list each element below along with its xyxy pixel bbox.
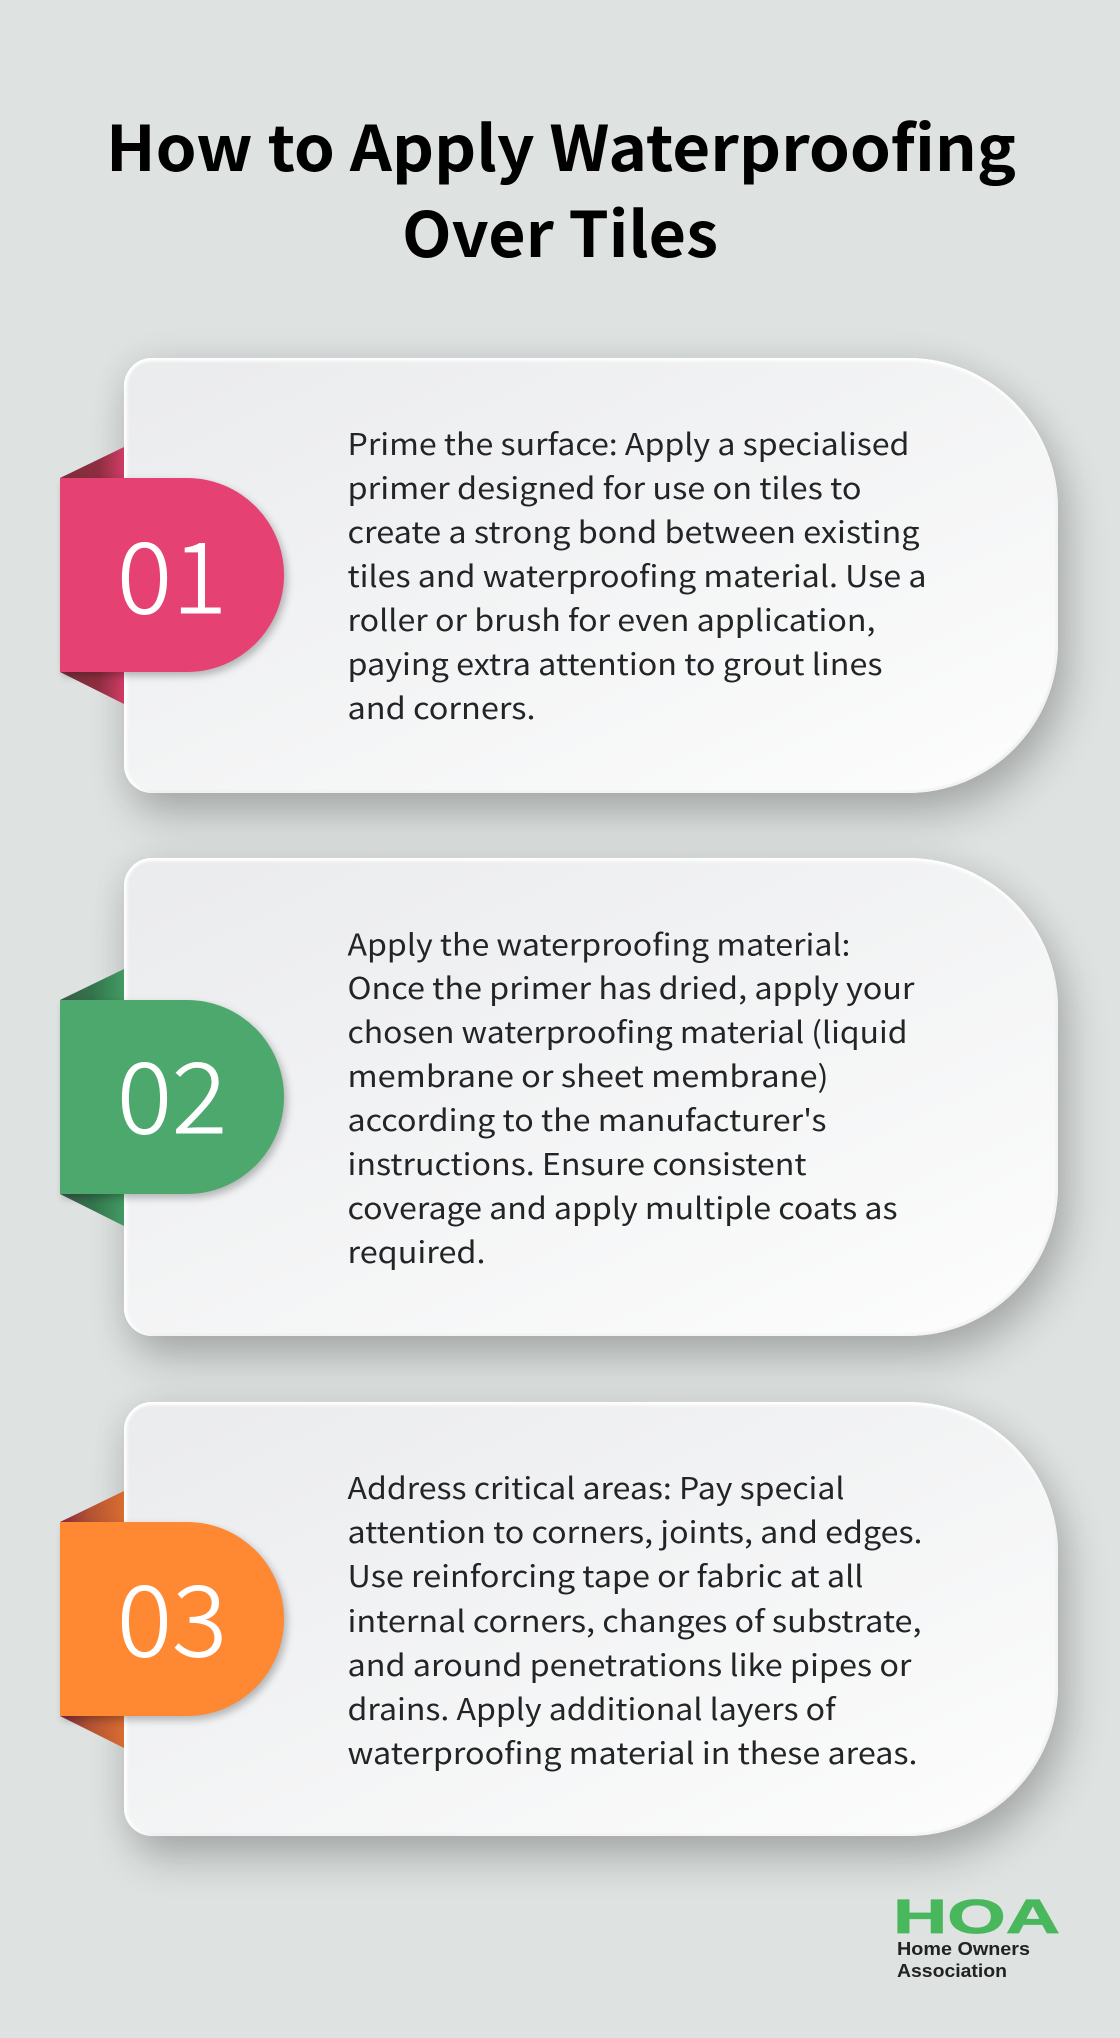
panel: step 3	[59, 1394, 1086, 1878]
text: step 3: waterproofing material in these areas.	[348, 1730, 918, 1773]
title	[106, 98, 1016, 275]
ribbon folds: step 3	[60, 1491, 124, 1748]
text: step 2: Apply the waterproofing material:	[348, 922, 850, 964]
text: step 2: membrane or sheet membrane)	[348, 1053, 828, 1096]
logo: HOA Home Owners Association	[893, 1891, 1060, 1981]
logo: HOA Home Owners Association: Home Owners	[897, 1938, 1030, 1959]
text: step 1: primer designed for use on tiles to	[348, 465, 862, 508]
text: step 2: Once the primer has dried, apply your	[348, 965, 915, 1008]
badge: 01: 01	[117, 500, 227, 642]
text: step 3: and around penetrations like pipes or	[348, 1642, 912, 1685]
title: Over Tiles	[402, 184, 718, 275]
text: step 1	[348, 421, 926, 728]
badge: 03: 03	[117, 1543, 227, 1685]
text: step 2: according to the manufacturer's	[348, 1097, 826, 1140]
text: step 3: drains. Apply additional layers of	[348, 1686, 837, 1729]
text: step 3: internal corners, changes of substrate,	[348, 1598, 922, 1641]
text: step 1: create a strong bond between existing	[348, 509, 920, 552]
card: step 1	[124, 358, 1058, 793]
text: step 2: chosen waterproofing material (liquid	[348, 1009, 908, 1052]
badge: 03	[60, 1522, 284, 1716]
text: step 1: roller or brush for even application,	[348, 597, 876, 640]
badge: 02	[60, 1000, 284, 1194]
text: step 1: tiles and waterproofing material. Use a	[348, 553, 926, 596]
text: step 2	[348, 922, 915, 1272]
text: step 3: Use reinforcing tape or fabric at all	[348, 1553, 864, 1596]
text: step 3: Address critical areas: Pay special	[348, 1465, 844, 1508]
ribbon folds: step 1	[60, 447, 124, 704]
panel: step 2	[59, 850, 1086, 1378]
text: step 1: Prime the surface: Apply a specialised	[348, 421, 910, 464]
logo: HOA Home Owners Association: HOA	[893, 1891, 1060, 1944]
card: step 2	[124, 858, 1058, 1336]
text: step 2: instructions. Ensure consistent	[348, 1141, 806, 1184]
text: step 1: paying extra attention to grout lines	[348, 641, 882, 684]
text: step 3: attention to corners, joints, and edges.	[348, 1509, 922, 1552]
panel: step 1	[59, 350, 1086, 834]
text: step 2: required.	[348, 1229, 486, 1272]
badge: 02: 02	[117, 1020, 227, 1162]
title: How to Apply Waterproofing	[106, 98, 1016, 189]
text: step 2: coverage and apply multiple coats as	[348, 1185, 898, 1228]
ribbon folds: step 2	[60, 969, 124, 1226]
text: step 1: and corners.	[348, 685, 536, 728]
card: step 3	[124, 1402, 1058, 1836]
logo: HOA Home Owners Association: Association	[897, 1960, 1007, 1981]
text: step 3	[348, 1465, 922, 1773]
badge: 01	[60, 478, 284, 672]
